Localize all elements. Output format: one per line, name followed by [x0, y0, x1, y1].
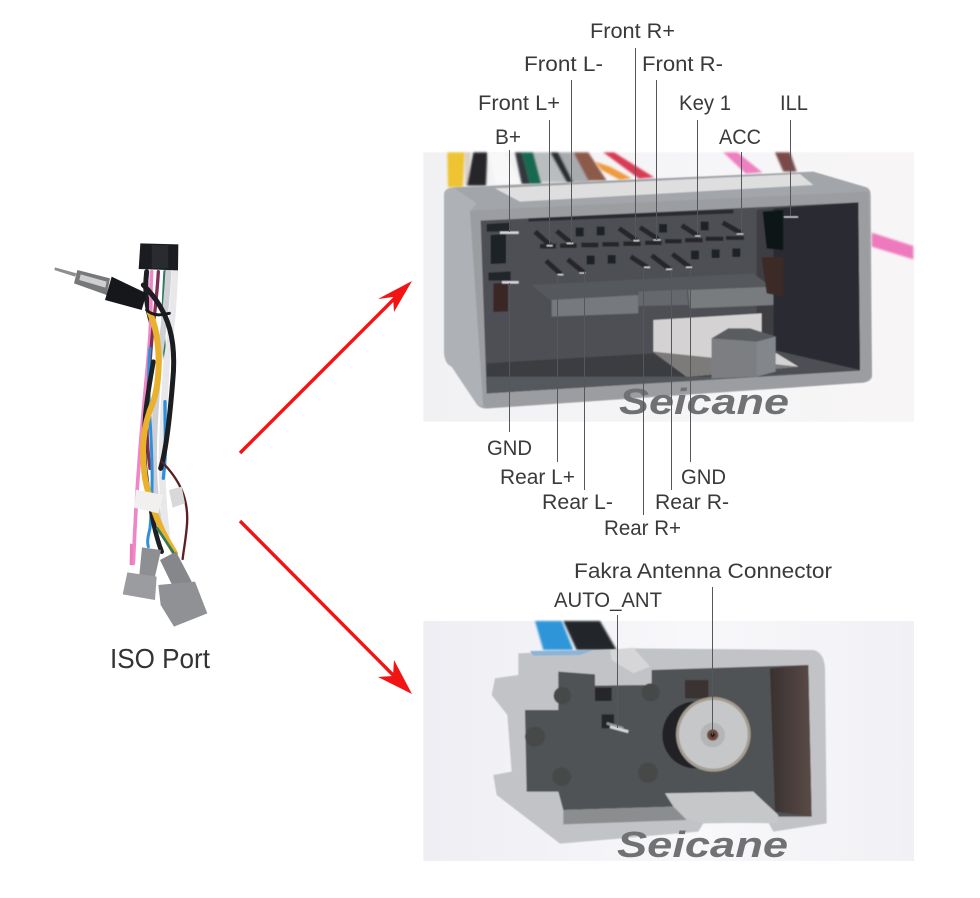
- arrow: to main connector: [240, 281, 412, 453]
- pin labels: Front R-: [642, 53, 723, 76]
- pin labels: Front R+: [590, 20, 675, 43]
- pin labels: Rear L+: [500, 466, 575, 489]
- pin labels: GND: [681, 466, 726, 489]
- photo: main connector: [423, 152, 914, 422]
- pin labels: Rear R+: [604, 517, 681, 540]
- pin labels: Front L-: [524, 53, 603, 76]
- pin labels: Fakra Antenna Connector: [574, 560, 832, 583]
- pin labels: ILL: [780, 92, 808, 115]
- photo: antenna connector: [423, 621, 914, 861]
- pin labels: AUTO_ANT: [554, 589, 662, 612]
- pin labels: ACC: [719, 126, 761, 149]
- pin labels: Rear R-: [655, 491, 729, 514]
- pin labels: GND: [487, 437, 532, 460]
- pin labels: Front L+: [478, 92, 560, 115]
- arrow: to antenna connector: [240, 521, 412, 694]
- watermark: top photo: Seicane: [619, 381, 789, 422]
- pin labels: Key 1: [679, 92, 731, 115]
- watermark: bottom photo: Seicane: [617, 824, 788, 865]
- wire harness photo: [54, 243, 207, 627]
- caption: ISO Port: ISO Port: [110, 643, 210, 674]
- pin labels: Rear L-: [542, 491, 613, 514]
- pin labels: B+: [495, 126, 521, 149]
- leader lines: [510, 48, 790, 735]
- pin labels: [478, 20, 832, 612]
